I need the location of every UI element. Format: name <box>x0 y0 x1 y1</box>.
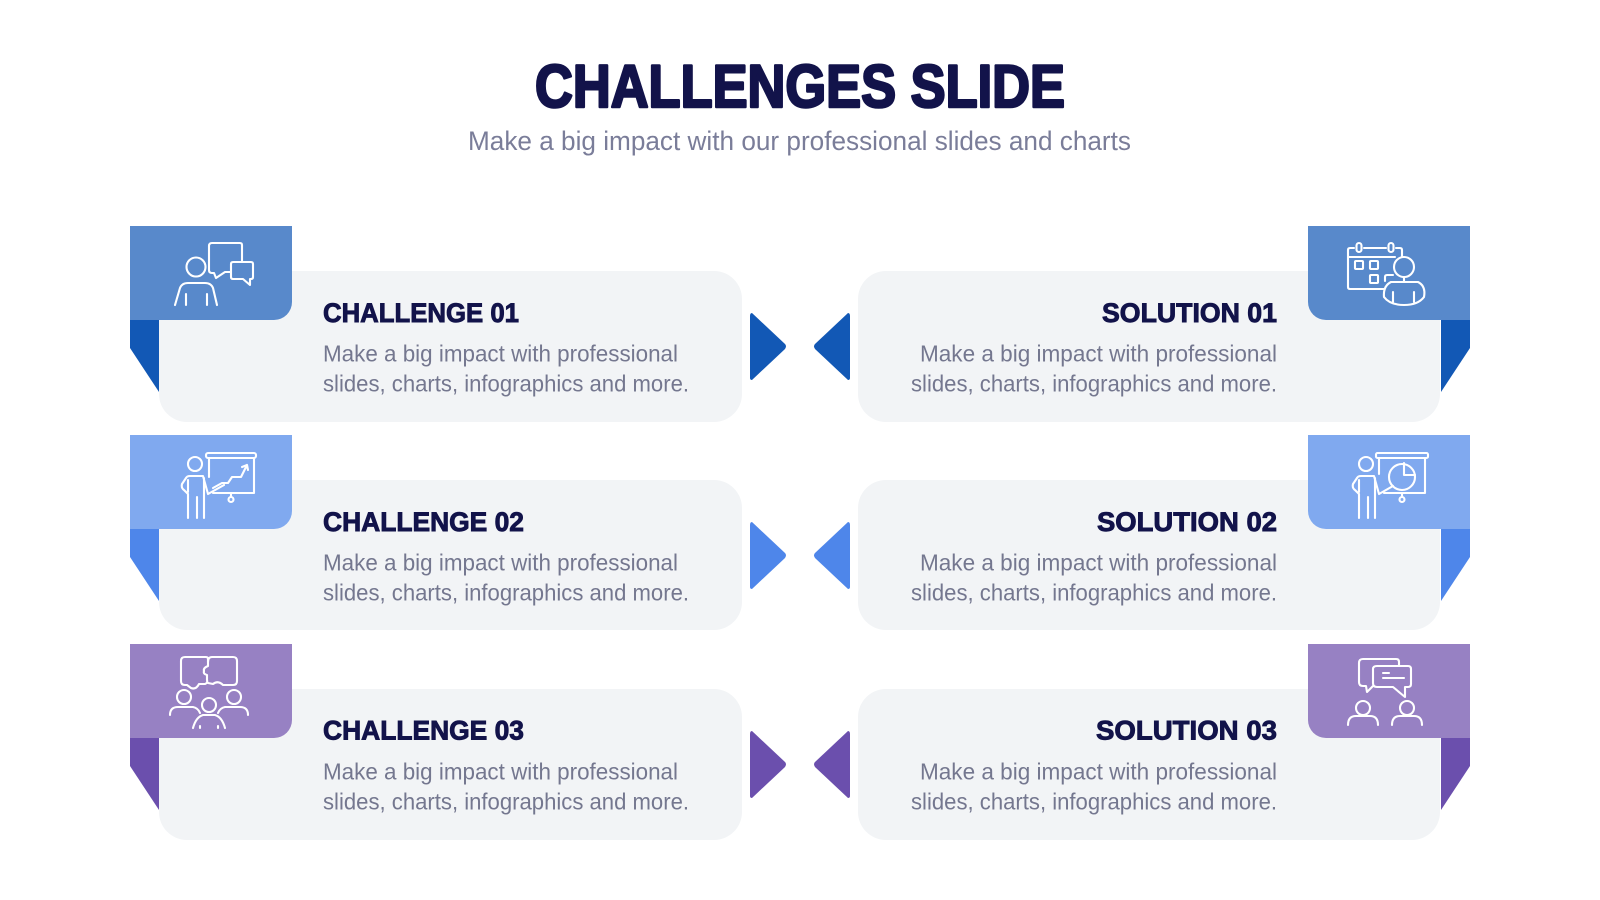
icon: presenter with line chart <box>182 453 256 518</box>
panel: challenge 02 <box>130 435 742 630</box>
body text: slides, charts, infographics and more. <box>911 580 1277 606</box>
panel: solution 03 <box>858 644 1470 840</box>
heading: CHALLENGE 01 <box>323 298 519 328</box>
heading: SOLUTION 01 <box>1102 298 1277 328</box>
ribbon fold <box>130 528 159 601</box>
arrow: challenge 01 <box>750 313 786 380</box>
icon tab <box>130 226 292 320</box>
subtitle: Make a big impact with our professional slides and charts <box>468 126 1131 156</box>
body text: slides, charts, infographics and more. <box>323 370 689 396</box>
body text: Make a big impact with professional <box>920 550 1277 576</box>
arrow: solution 02 <box>814 522 850 589</box>
body text: slides, charts, infographics and more. <box>911 788 1277 814</box>
icon tab <box>1308 644 1470 738</box>
icon: two people talking <box>1348 659 1422 725</box>
icon: person with speech bubbles <box>175 243 253 305</box>
body text: Make a big impact with professional <box>323 550 678 576</box>
panel: solution 02 <box>858 435 1470 630</box>
arrow: challenge 03 <box>750 731 786 798</box>
arrow: challenge 02 <box>750 522 786 589</box>
icon: group with puzzle speech bubbles <box>170 657 248 728</box>
icon tab <box>1308 435 1470 529</box>
body text: slides, charts, infographics and more. <box>323 788 689 814</box>
card background <box>858 480 1440 630</box>
body text: Make a big impact with professional <box>920 758 1277 784</box>
icon: presenter with pie chart <box>1353 453 1428 518</box>
body text: slides, charts, infographics and more. <box>911 370 1277 396</box>
heading: CHALLENGE 02 <box>323 507 524 537</box>
icon tab <box>130 644 292 738</box>
arrow: solution 03 <box>814 731 850 798</box>
heading: CHALLENGE 03 <box>323 716 524 746</box>
icon tab <box>130 435 292 529</box>
ribbon fold <box>130 320 159 392</box>
card background <box>858 689 1440 840</box>
heading: SOLUTION 03 <box>1096 716 1277 746</box>
arrow: solution 01 <box>814 313 850 380</box>
icon tab <box>1308 226 1470 320</box>
card background <box>858 271 1440 422</box>
body text: slides, charts, infographics and more. <box>323 580 689 606</box>
heading: SOLUTION 02 <box>1097 507 1277 537</box>
panel: challenge 01 <box>130 226 742 422</box>
ribbon fold <box>1441 320 1470 392</box>
card background <box>159 480 742 630</box>
body text: Make a big impact with professional <box>323 340 678 366</box>
panel: challenge 03 <box>130 644 742 840</box>
body text: Make a big impact with professional <box>323 758 678 784</box>
title: CHALLENGES SLIDE <box>535 53 1065 120</box>
card background <box>159 689 742 840</box>
icon: calendar and person <box>1348 243 1424 305</box>
ribbon fold <box>1441 528 1470 601</box>
card background <box>159 271 742 422</box>
body text: Make a big impact with professional <box>920 340 1277 366</box>
ribbon fold <box>1441 737 1470 810</box>
ribbon fold <box>130 737 159 810</box>
panel: solution 01 <box>858 226 1470 422</box>
